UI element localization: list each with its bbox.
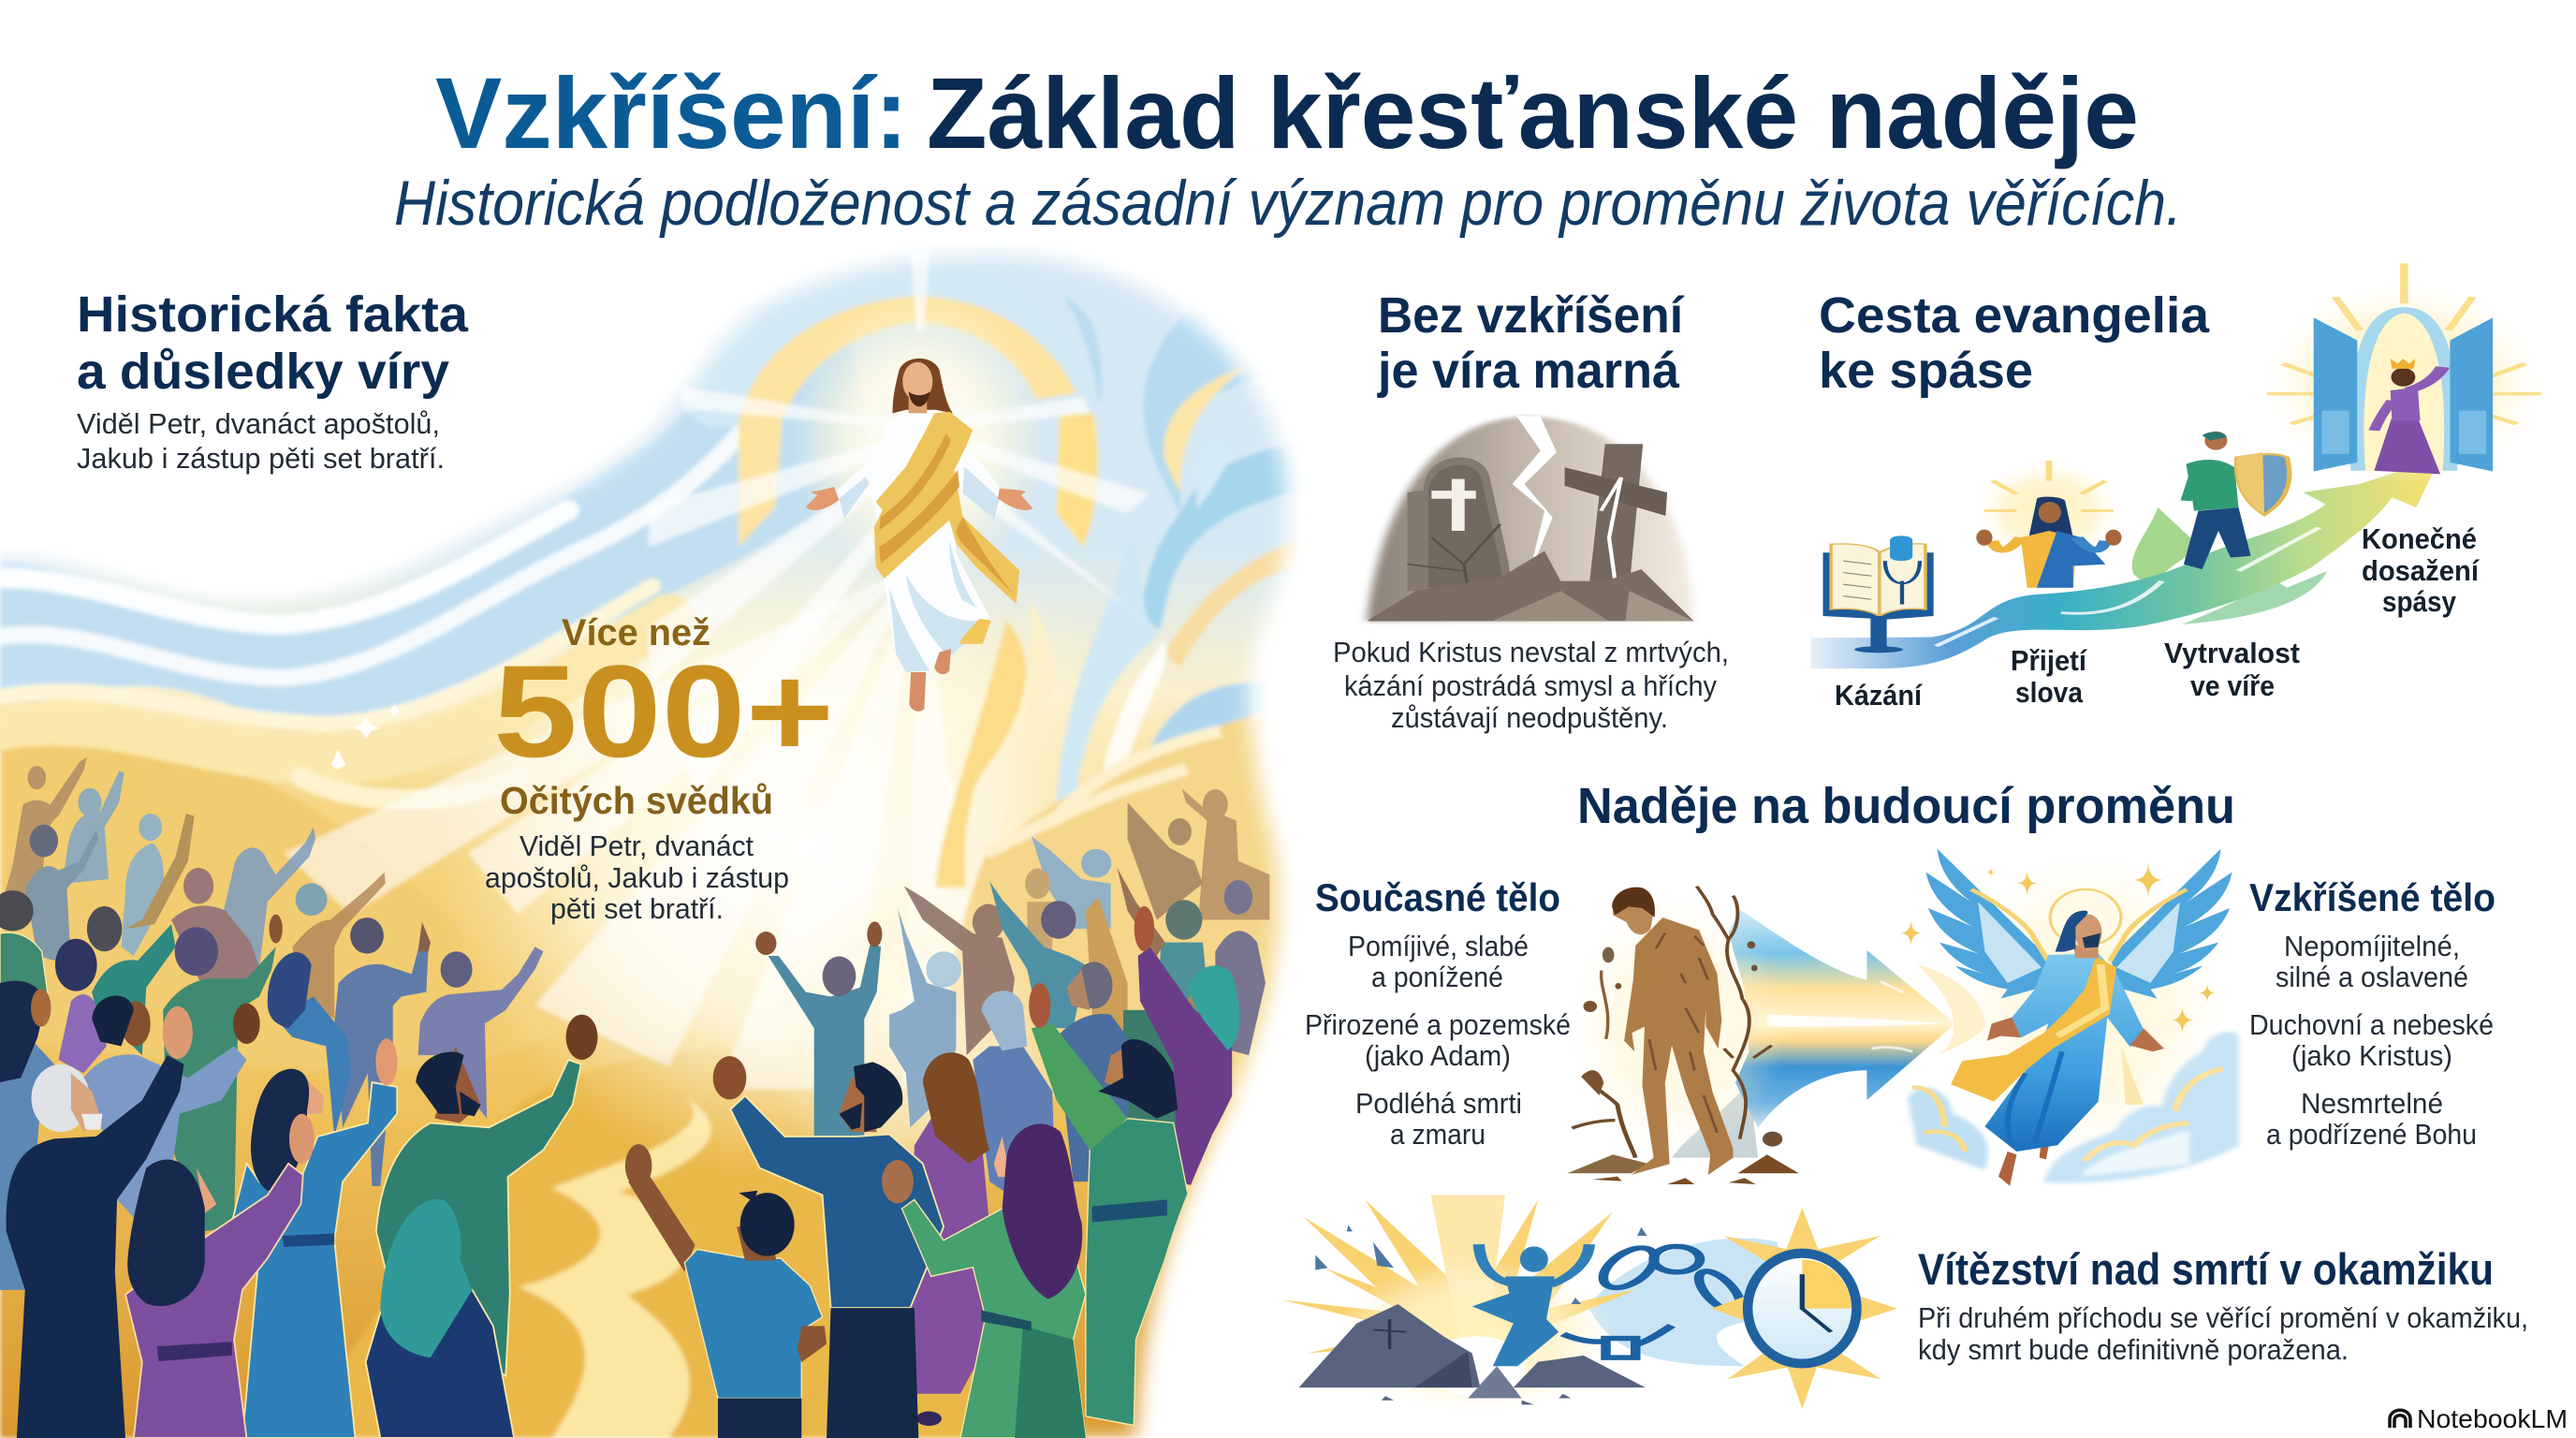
path ribbon xyxy=(1811,457,2440,668)
blue swoosh xyxy=(1588,1239,1793,1366)
stat: 500+ eyewitnesses: apoštolů, Jakub i zástup xyxy=(485,861,789,894)
subtitle: Historická podloženost a zásadní význam pro proměnu života věřících. xyxy=(394,168,2182,239)
heading: gospel path xyxy=(1819,287,2210,399)
icon: open door and crowned figure xyxy=(2267,263,2541,484)
heading: historical facts xyxy=(77,286,469,400)
figure: purple robed person with teal hood xyxy=(1134,906,1239,1186)
text block: resurrected body: silné a oslavené xyxy=(2276,961,2468,993)
heading: gospel path: Cesta evangelia xyxy=(1819,287,2210,344)
icon: book and microphone xyxy=(1822,536,1934,653)
text block: resurrected body: Vzkříšené tělo xyxy=(2249,875,2496,919)
text block: without resurrection: kázání postrádá smysl a hříchy xyxy=(1344,669,1717,702)
crowd: left side xyxy=(0,757,597,1438)
title: Základ křesťanské naděje xyxy=(927,56,2139,169)
crowd of eyewitnesses xyxy=(0,757,1269,1438)
heading: victory over death: Vítězství nad smrtí v okamžiku xyxy=(1918,1244,2494,1294)
labels: path steps: Kázání xyxy=(1835,679,1923,712)
stat: 500+ eyewitnesses: 500+ xyxy=(493,638,834,785)
figure: man in green shirt xyxy=(376,1015,597,1375)
text block: current body: (jako Adam) xyxy=(1365,1039,1511,1072)
text block: resurrected body xyxy=(2249,875,2496,1151)
heading: gospel path: ke spáse xyxy=(1819,343,2033,399)
text block: current body: Současné tělo xyxy=(1315,875,1560,919)
figure: big man in green robe xyxy=(1029,983,1188,1425)
text block: witnesses list: Viděl Petr, dvanáct apoštolů, xyxy=(77,407,440,440)
crowd: right side xyxy=(625,789,1269,1438)
text block: victory over death: kdy smrt bude definitivně poražena. xyxy=(1918,1333,2349,1366)
text block: current body: Podléhá smrti xyxy=(1355,1087,1522,1120)
text block: witnesses list: Jakub i zástup pěti set bratří. xyxy=(77,442,445,475)
labels: path steps: Vytrvalost xyxy=(2164,637,2300,669)
figure: woman in purple xyxy=(125,1159,303,1438)
figure: risen Christ xyxy=(806,359,1032,712)
icon: glorified body xyxy=(1899,849,2239,1186)
icon: broken tomb and cross xyxy=(1367,416,1694,621)
title: Vzkříšení: xyxy=(435,56,908,169)
text block: resurrected body: (jako Kristus) xyxy=(2291,1039,2452,1072)
arrow: transformation xyxy=(1672,910,1955,1158)
figure: woman in green with purple hair xyxy=(882,1123,1086,1438)
text block: resurrected body: a podřízené Bohu xyxy=(2266,1118,2477,1151)
stat: 500+ eyewitnesses: Viděl Petr, dvanáct xyxy=(520,829,754,862)
labels: path steps: spásy xyxy=(2382,585,2457,618)
text block: resurrected body: Duchovní a nebeské xyxy=(2249,1008,2494,1041)
stat: 500+ eyewitnesses: Více než xyxy=(562,612,710,653)
logo: NotebookLM: NotebookLM xyxy=(2417,1404,2568,1433)
labels: path steps xyxy=(1835,522,2480,712)
figure: woman in teal hood xyxy=(366,1199,514,1438)
heading: historical facts: Historická fakta xyxy=(77,286,469,343)
clock with sun xyxy=(1711,1208,1897,1409)
heading: without resurrection: Bez vzkříšení xyxy=(1378,287,1685,344)
text block: current body: Pomíjivé, slabé xyxy=(1348,930,1529,962)
heading: historical facts: a důsledky víry xyxy=(77,344,449,400)
chain xyxy=(1563,1244,1749,1357)
figure: woman in blue robe xyxy=(232,1038,398,1438)
stat: 500+ eyewitnesses: pěti set bratří. xyxy=(550,892,724,925)
labels: path steps: Konečné xyxy=(2362,522,2477,555)
right wing xyxy=(2110,849,2232,999)
heading: hope of transformation: Naděje na budoucí proměnu xyxy=(1577,778,2235,834)
labels: path steps: dosažení xyxy=(2362,554,2480,587)
rocks xyxy=(1299,1225,1647,1404)
text block: without resurrection: Pokud Kristus nevstal z mrtvých, xyxy=(1333,636,1729,668)
labels: path steps: ve víře xyxy=(2190,669,2275,702)
diagram: path to salvation xyxy=(1811,263,2541,668)
icon: victory over death xyxy=(1282,1196,1897,1413)
figure: elderly man in navy xyxy=(7,1006,193,1438)
stat: 500+ eyewitnesses: Očitých svědků xyxy=(500,779,773,822)
heading: without resurrection xyxy=(1377,287,1685,399)
clouds xyxy=(1908,1032,2239,1183)
icon: person receiving the word xyxy=(1976,461,2122,588)
text block: victory over death: Při druhém příchodu se věřící promění v okamžiku, xyxy=(1918,1301,2528,1334)
figure: woman in purple with brown hair xyxy=(910,1052,989,1426)
text block: current body: a ponížené xyxy=(1371,961,1503,993)
figure: man in navy sweater xyxy=(713,1056,944,1438)
text block: victory over death xyxy=(1918,1301,2528,1366)
icon: walker with shield xyxy=(2184,432,2290,569)
sparkles xyxy=(331,705,846,889)
sky, glow and dune background xyxy=(0,243,1317,1438)
halo and swirling light (Christ's surroundings) xyxy=(649,253,1317,888)
panel: resurrection scene illustration xyxy=(0,243,1317,1438)
text block: without resurrection: zůstávají neodpuštěny. xyxy=(1391,701,1668,734)
figure: boy in blue shirt xyxy=(625,1144,827,1438)
text block: witnesses list xyxy=(77,407,445,475)
labels: path steps: Přijetí xyxy=(2011,644,2087,677)
sparkles xyxy=(1899,861,2217,1035)
text block: resurrected body: Nepomíjitelné, xyxy=(2284,930,2460,962)
labels: path steps: slova xyxy=(2015,676,2084,709)
text block: without resurrection xyxy=(1333,636,1729,734)
burst xyxy=(1282,1196,1637,1354)
icon: decaying body xyxy=(1568,887,1799,1184)
figure: leaping person xyxy=(1472,1244,1589,1366)
text block: current body: Přirozené a pozemské xyxy=(1305,1008,1571,1041)
text block: resurrected body: Nesmrtelné xyxy=(2301,1087,2443,1120)
stat: 500+ eyewitnesses xyxy=(485,612,834,925)
left wing xyxy=(1925,849,2048,999)
text block: current body: a zmaru xyxy=(1390,1118,1486,1151)
text block: current body xyxy=(1305,875,1571,1151)
heading: without resurrection: je víra marná xyxy=(1377,343,1680,399)
